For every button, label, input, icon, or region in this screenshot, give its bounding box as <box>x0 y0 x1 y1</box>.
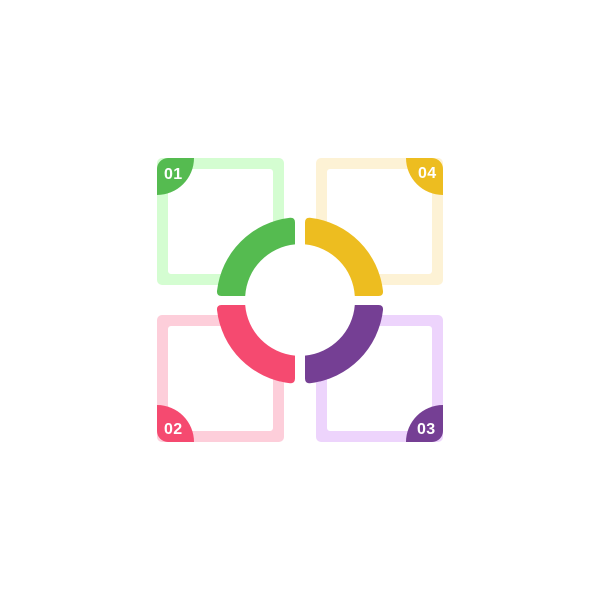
badge 03 <box>406 405 443 442</box>
panel 03: purple frame <box>316 315 443 442</box>
panel 02: pink frame <box>157 315 284 442</box>
centre: white circle masking frames <box>230 230 370 370</box>
number 01: 01 <box>164 166 183 183</box>
ring segment: green <box>217 218 295 296</box>
number 02: 02 <box>164 421 183 438</box>
ring segment: pink <box>217 305 295 383</box>
ring segment: yellow <box>305 218 383 296</box>
panel 01: green frame <box>157 158 284 285</box>
badge 02 <box>157 405 194 442</box>
ring segment: purple <box>305 305 383 383</box>
number 04: 04 <box>418 165 437 182</box>
badge 01 <box>157 158 194 195</box>
number 03: 03 <box>417 421 436 438</box>
badge 04 <box>406 158 443 195</box>
panel 04: yellow frame <box>316 158 443 285</box>
